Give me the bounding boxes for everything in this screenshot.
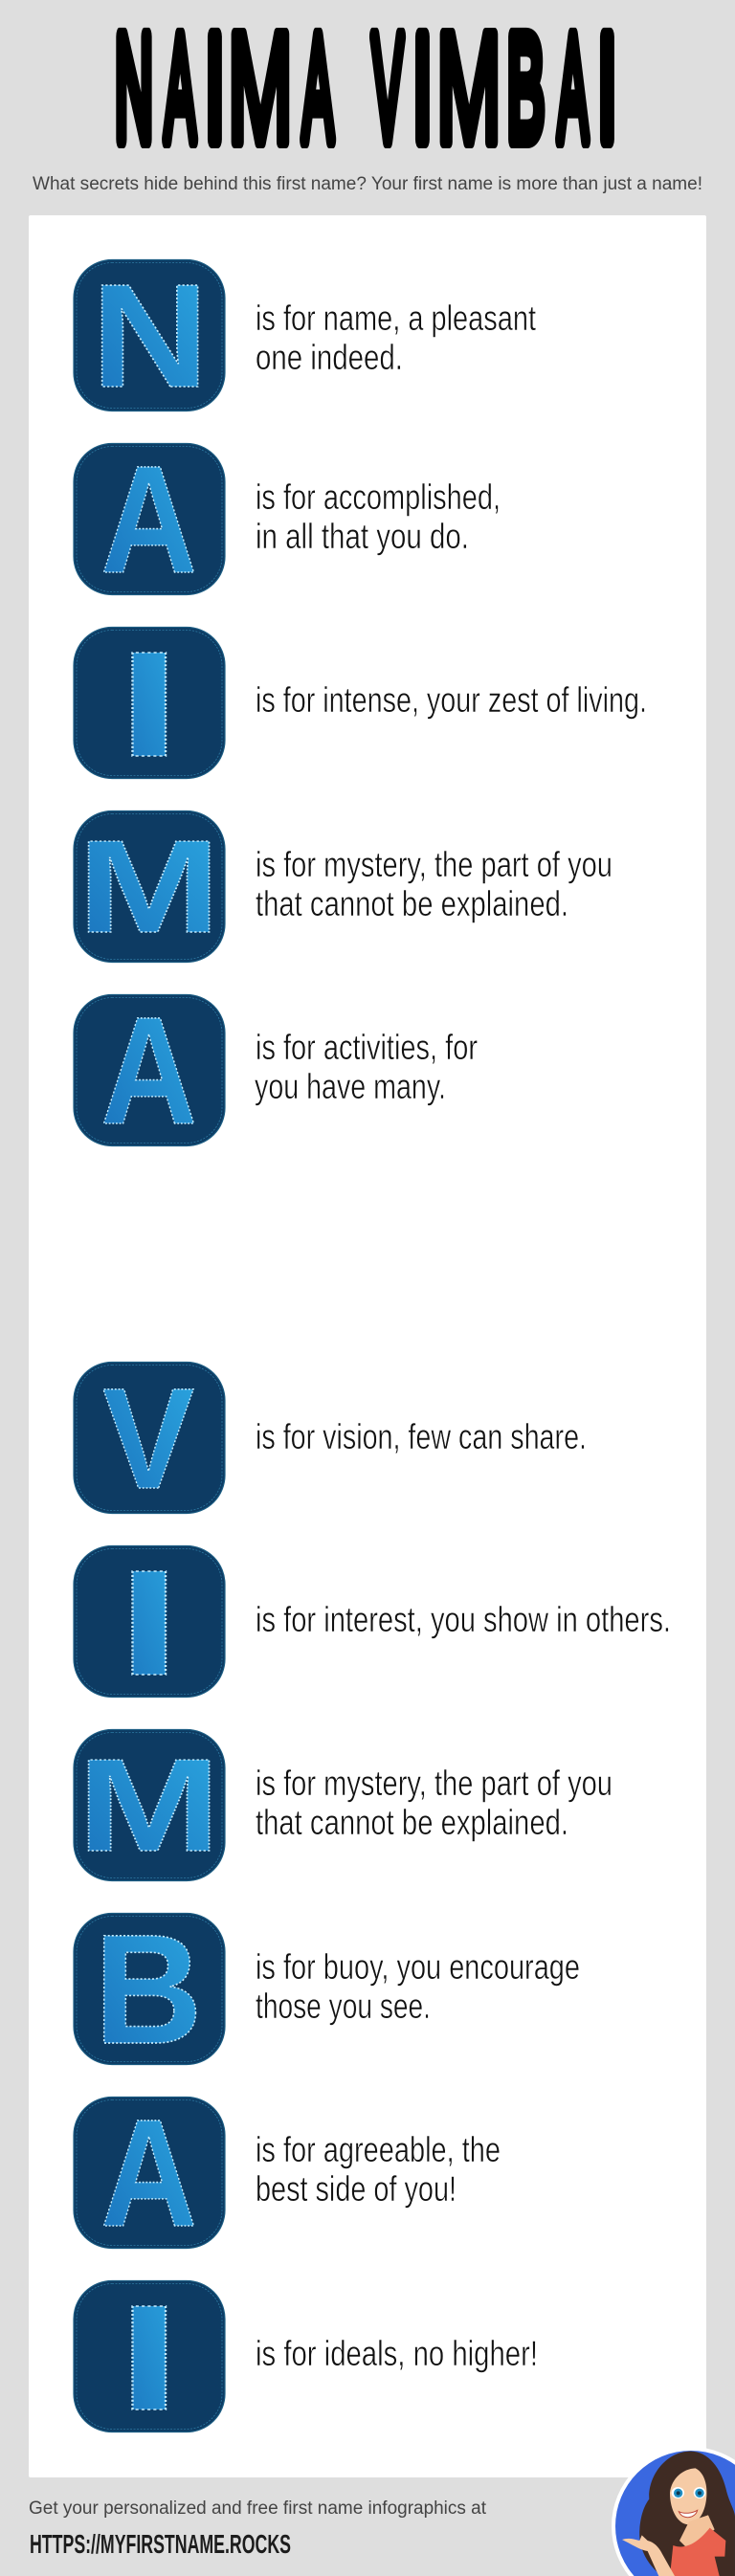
row: I for interest xyxy=(74,1539,671,1706)
title: M xyxy=(228,1,293,176)
title: M xyxy=(436,1,501,176)
footer url: HTTPS://MYFIRSTNAME.ROCKS xyxy=(30,2529,291,2559)
row: A for accomplished xyxy=(74,433,501,605)
title: I xyxy=(598,5,616,171)
row: M for mystery xyxy=(74,811,612,963)
row: V for vision xyxy=(74,1359,587,1520)
text: A line xyxy=(256,477,501,556)
text: M line xyxy=(256,1764,612,1842)
icon: avatar xyxy=(612,2447,735,2576)
icon: letter M: M xyxy=(78,812,221,960)
row: N for name xyxy=(74,254,537,418)
icon: letter A: A xyxy=(100,2087,197,2258)
icon: letter V: V xyxy=(102,1359,194,1520)
icon: letter I: I xyxy=(117,620,181,788)
title: A xyxy=(165,5,195,171)
title: N xyxy=(115,4,153,171)
text: M line: that cannot be explained. xyxy=(256,884,568,923)
text: M line: that cannot be explained. xyxy=(256,1803,568,1842)
title: A xyxy=(302,5,333,171)
text: A line: is for agreeable, the xyxy=(256,2130,501,2169)
icon: letter V xyxy=(74,1359,225,1520)
title: I xyxy=(413,5,432,171)
footer text: Get your personalized and free first name infographics at xyxy=(29,2498,487,2519)
text: A line: is for accomplished, xyxy=(256,477,501,517)
title: I xyxy=(206,5,224,171)
text: A line xyxy=(255,1028,478,1106)
row: I for intense xyxy=(74,620,647,788)
icon: letter B: B xyxy=(94,1901,203,2076)
text: B line xyxy=(256,1947,580,2026)
icon: letter I: I xyxy=(117,2274,181,2441)
row: A for agreeable xyxy=(74,2087,501,2258)
text: N line: is for name, a pleasant xyxy=(256,299,537,338)
icon: letter I xyxy=(74,1539,225,1706)
icon: letter I xyxy=(74,620,225,788)
icon: letter N: N xyxy=(91,254,209,418)
text: A line xyxy=(256,2130,501,2209)
row: I for ideals xyxy=(74,2274,538,2441)
text: B line: is for buoy, you encourage xyxy=(256,1947,580,1987)
row: A for activities xyxy=(74,985,478,1156)
text: A line: is for activities, for xyxy=(256,1028,478,1067)
text: A line: in all that you do. xyxy=(256,517,469,556)
row: B for buoy xyxy=(74,1901,580,2076)
row: M for mystery xyxy=(74,1730,612,1881)
icon: letter A xyxy=(74,2087,225,2258)
text: M line xyxy=(256,845,612,923)
title: A xyxy=(558,6,588,171)
text: M line: is for mystery, the part of you xyxy=(256,1764,612,1803)
icon: letter A: A xyxy=(100,985,197,1156)
text: A line: you have many. xyxy=(255,1067,446,1106)
icon: letter A xyxy=(74,433,225,605)
title: V xyxy=(372,4,403,171)
text: I line: is for ideals, no higher! xyxy=(256,2334,538,2373)
text: N line: one indeed. xyxy=(256,338,403,377)
text: V line: is for vision, few can share. xyxy=(256,1417,587,1456)
text: N line xyxy=(256,299,537,377)
icon: letter A xyxy=(74,985,225,1156)
icon: letter A: A xyxy=(100,433,197,605)
title xyxy=(115,1,616,176)
text: A line: best side of you! xyxy=(256,2169,457,2209)
text: M line: is for mystery, the part of you xyxy=(256,845,612,884)
icon: letter I xyxy=(74,2274,225,2441)
icon: letter I: I xyxy=(117,1539,181,1706)
text: B line: those you see. xyxy=(256,1987,431,2026)
title: B xyxy=(507,4,545,171)
icon: letter M: M xyxy=(78,1731,221,1878)
subtitle: What secrets hide behind this first name? Your first name is more than just a name! xyxy=(33,174,702,194)
